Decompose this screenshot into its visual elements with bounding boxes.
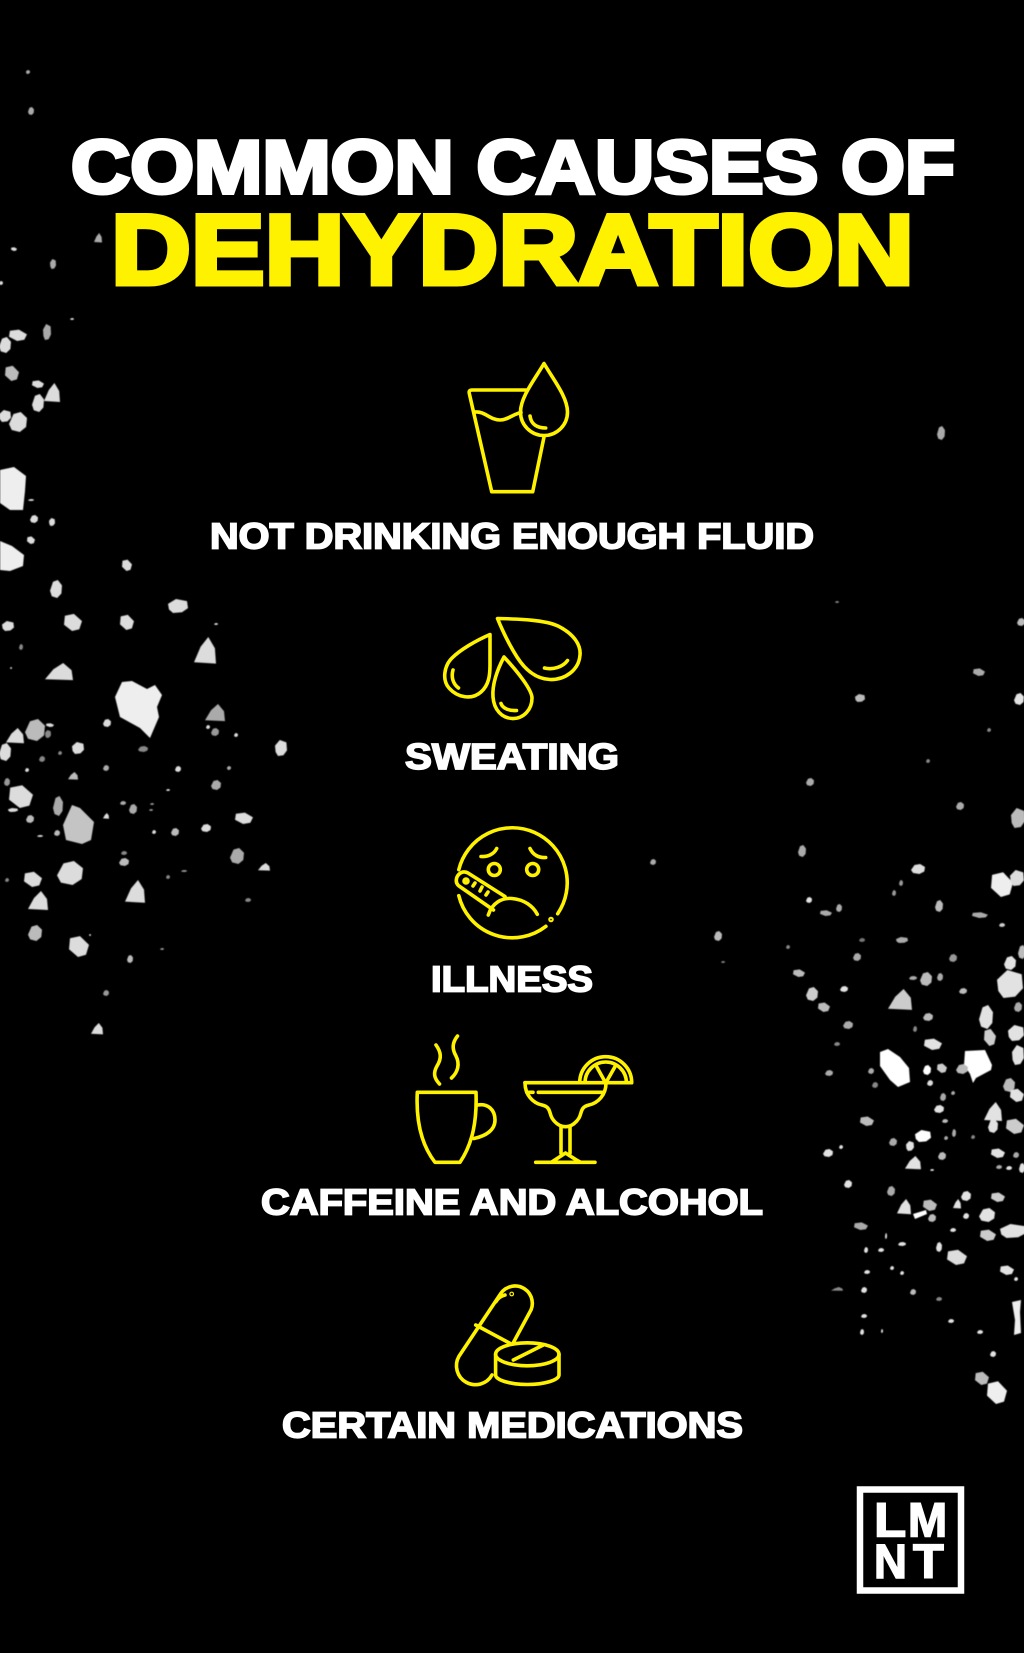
- label: CAFFEINE AND ALCOHOL: [261, 1182, 763, 1222]
- crystals: left scatter: [0, 70, 287, 1034]
- logo: LMNT: [860, 1490, 961, 1590]
- title: [71, 125, 955, 305]
- icon: steaming coffee cup: [417, 1036, 495, 1162]
- logo: LMNT: M: [908, 1494, 947, 1548]
- cause: sweating: [405, 618, 619, 777]
- label: SWEATING: [405, 736, 619, 777]
- icon: capsule and tablet: [456, 1286, 559, 1385]
- heading: common causes of: COMMON CAUSES OF: [71, 125, 955, 209]
- cause: not drinking enough fluid: [210, 364, 814, 556]
- cause: caffeine and alcohol: [261, 1036, 763, 1222]
- icon: glass with water drop: [469, 364, 568, 492]
- logo: LMNT: N: [874, 1535, 907, 1588]
- logo: LMNT: L: [874, 1493, 906, 1547]
- heading: dehydration: DEHYDRATION: [111, 194, 914, 305]
- icon: margarita glass with citrus: [525, 1057, 632, 1162]
- logo: LMNT: T: [913, 1535, 944, 1589]
- cause: certain medications: [282, 1286, 743, 1446]
- crystals: right scatter: [650, 426, 1024, 1404]
- cause: illness: [431, 828, 593, 1000]
- icon: sweat drops: [445, 618, 580, 719]
- label: CERTAIN MEDICATIONS: [282, 1404, 743, 1446]
- icon: sick face with thermometer: [456, 828, 567, 938]
- label: ILLNESS: [431, 958, 593, 1000]
- label: NOT DRINKING ENOUGH FLUID: [210, 516, 814, 556]
